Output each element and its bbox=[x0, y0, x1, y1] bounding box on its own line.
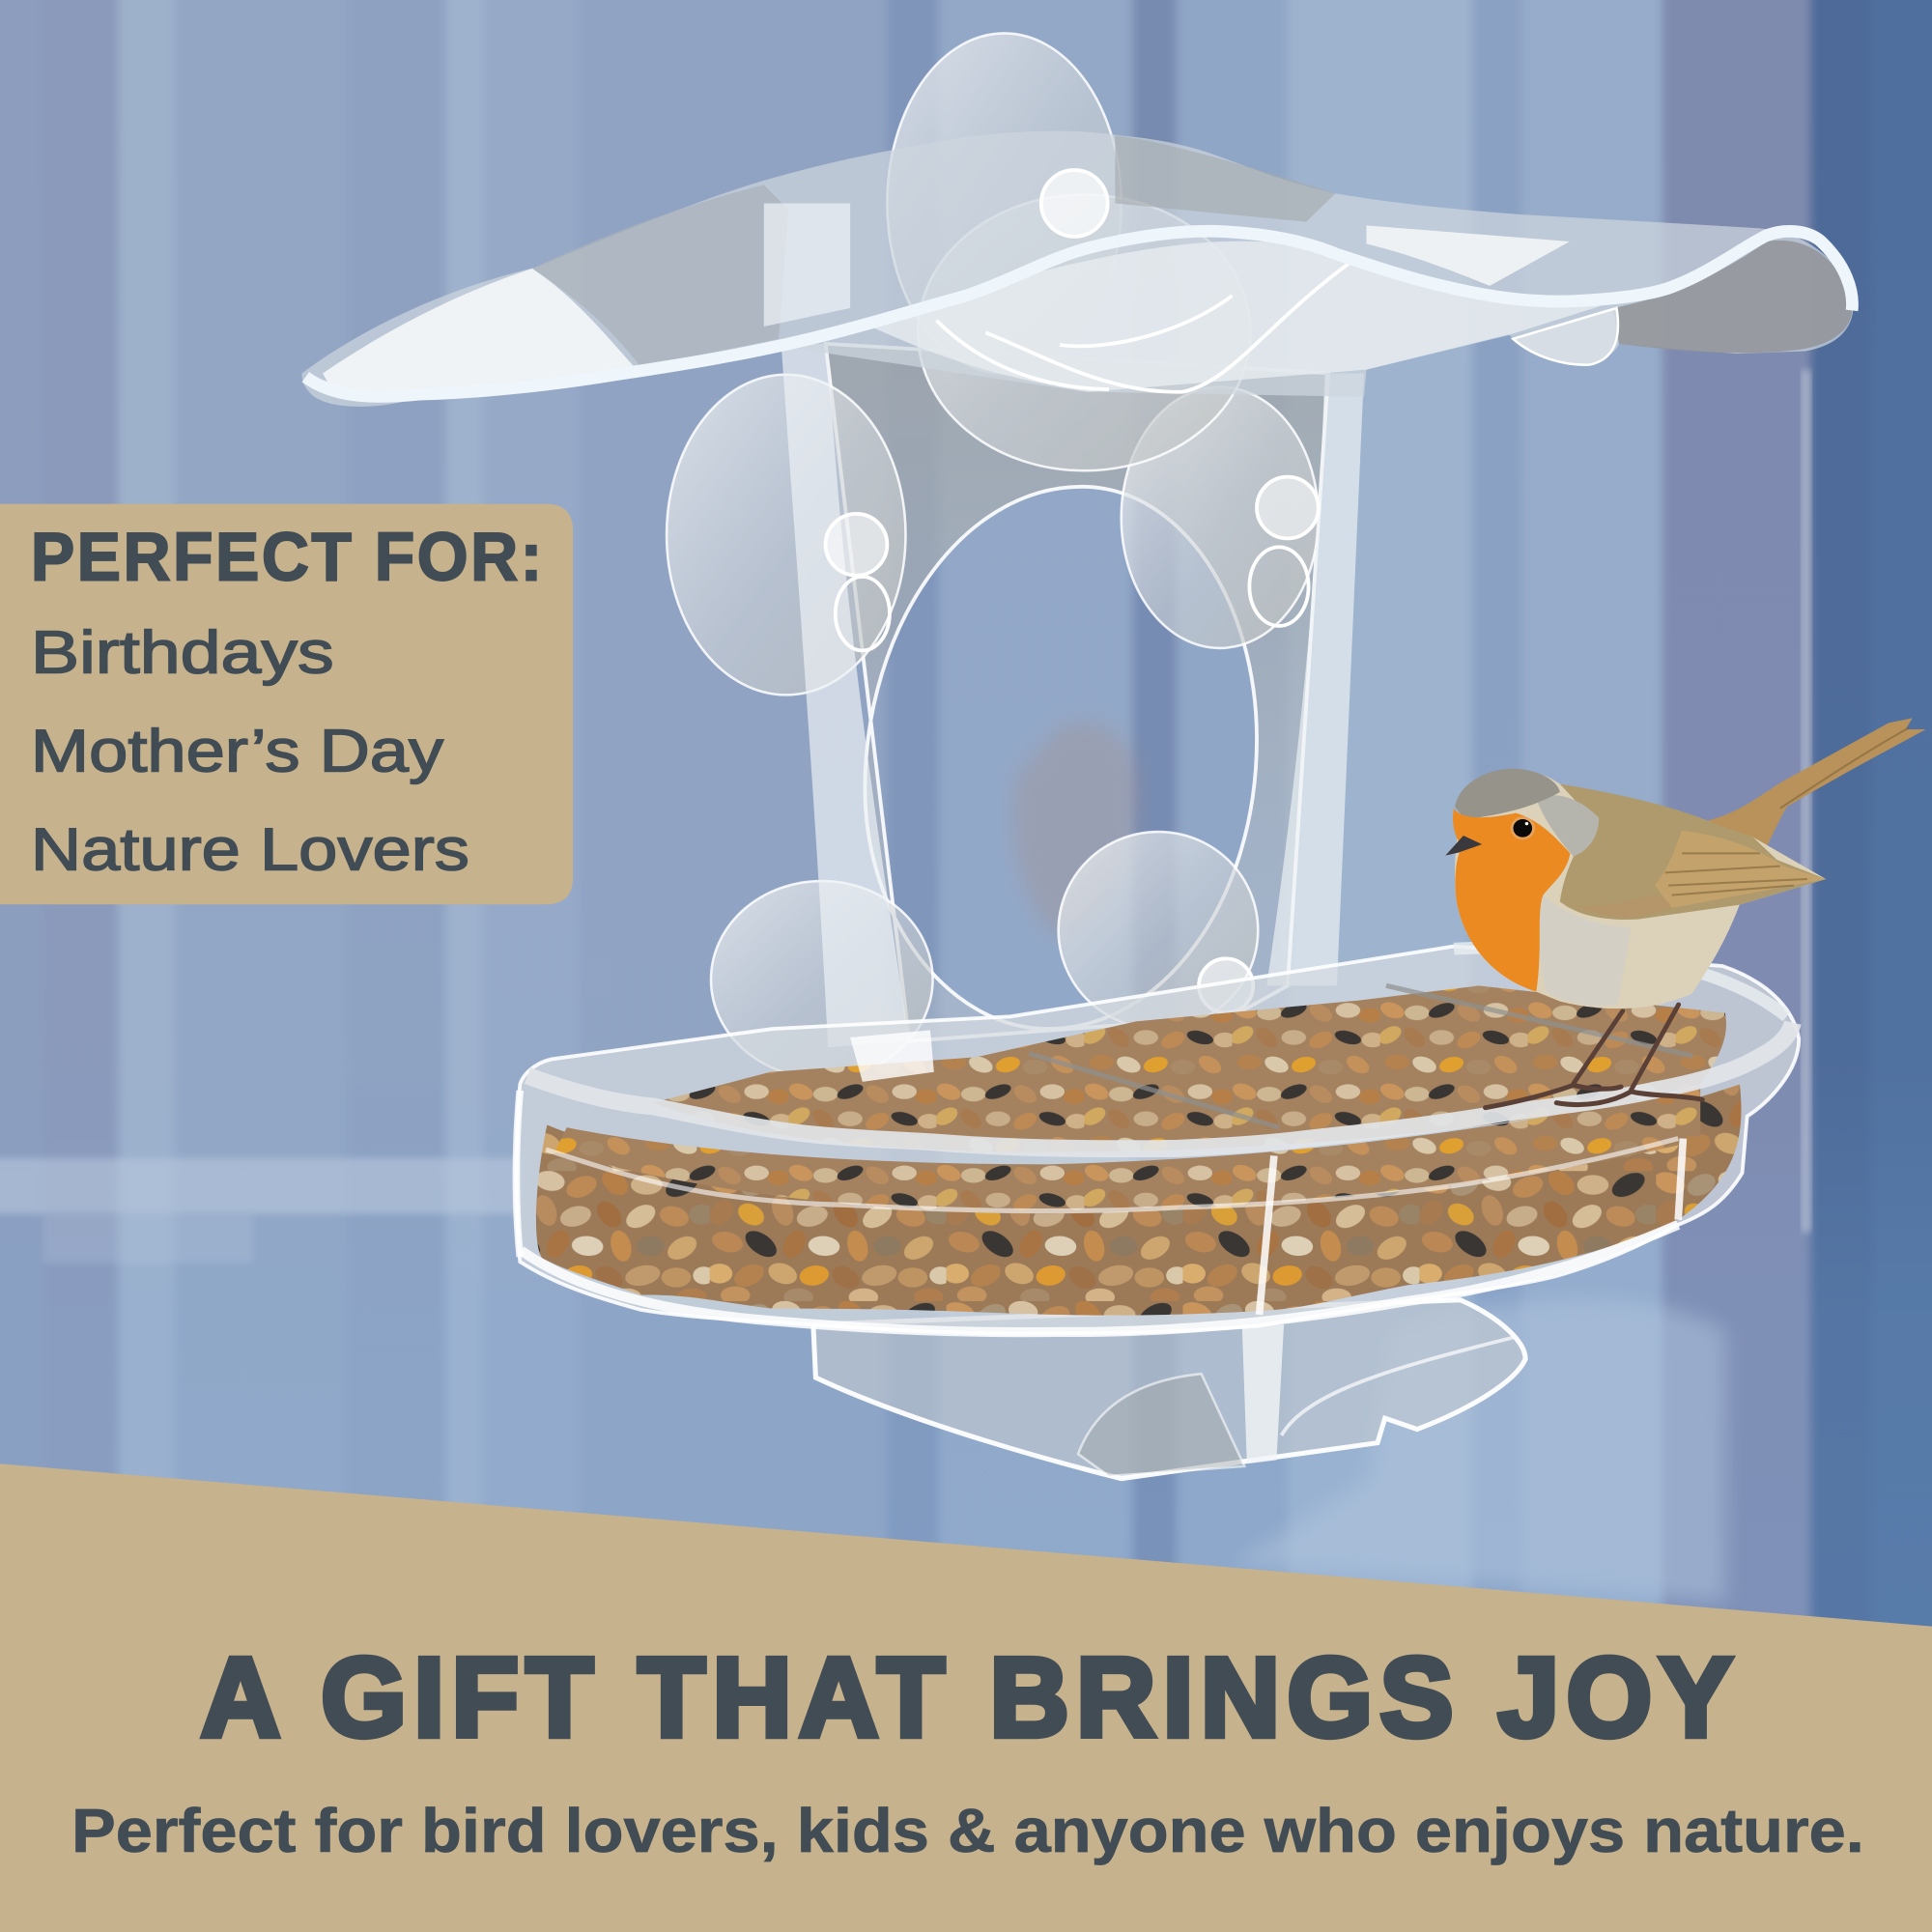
suction cups bbox=[667, 33, 1319, 1078]
upright base bbox=[850, 1030, 934, 1082]
beak bbox=[1445, 836, 1482, 856]
roof front rim bbox=[305, 231, 1852, 396]
subtitle: Perfect for bird lovers, kids & anyone who enjoys nature. bbox=[71, 1796, 1864, 1865]
back plate band around round opening bbox=[826, 344, 1328, 1041]
bottom banner bbox=[0, 1463, 1932, 1932]
front seeds upper band bbox=[554, 1087, 1700, 1213]
legs and feet bbox=[1486, 1005, 1702, 1108]
roof grey patches bbox=[532, 185, 788, 367]
tray bottom edge bbox=[522, 1225, 1678, 1332]
clear rim bbox=[527, 1023, 1793, 1149]
wing feathers bbox=[1570, 831, 1826, 918]
tray dividers bbox=[1029, 985, 1693, 1315]
robin bbox=[1445, 718, 1926, 1108]
panel: perfect for bbox=[0, 504, 573, 904]
grey cap bbox=[1455, 769, 1560, 819]
white belly bbox=[1538, 895, 1632, 1006]
roof brace embossing bbox=[764, 203, 850, 327]
small cup behind roof bbox=[1513, 308, 1618, 365]
list item: Birthdays: Birthdays bbox=[31, 618, 334, 686]
roof underside centre bbox=[863, 242, 1602, 392]
acrylic uprights bbox=[781, 344, 1364, 1047]
back and wing bbox=[1560, 784, 1826, 920]
orange breast bbox=[1453, 809, 1570, 992]
top cup knob bbox=[1041, 170, 1108, 237]
list item: Mother's Day: Mother’s Day bbox=[31, 717, 444, 784]
eye bbox=[1511, 816, 1535, 839]
roof white panel bbox=[1367, 225, 1570, 286]
list item: Nature Lovers: Nature Lovers bbox=[31, 816, 469, 884]
title: A GIFT THAT BRINGS JOY bbox=[201, 1634, 1740, 1760]
bottom bracket bbox=[813, 1300, 1525, 1479]
roof bbox=[301, 131, 1853, 407]
grey neck bbox=[1536, 795, 1599, 857]
cup knobs bbox=[826, 477, 1319, 1012]
body bbox=[1455, 770, 1826, 1009]
roof underside right bbox=[1613, 241, 1853, 353]
panel heading: PERFECT FOR: bbox=[31, 519, 545, 595]
roof crease lines bbox=[936, 259, 1355, 392]
back seeds bbox=[653, 985, 1726, 1152]
roof tip highlight bbox=[323, 269, 635, 392]
tray bbox=[516, 947, 1799, 1334]
front seeds bbox=[536, 1084, 1742, 1316]
rear rim bbox=[1454, 948, 1786, 1016]
bird feeder bbox=[301, 33, 1853, 1479]
second lip bbox=[546, 1139, 1678, 1211]
tail bbox=[1706, 718, 1926, 850]
